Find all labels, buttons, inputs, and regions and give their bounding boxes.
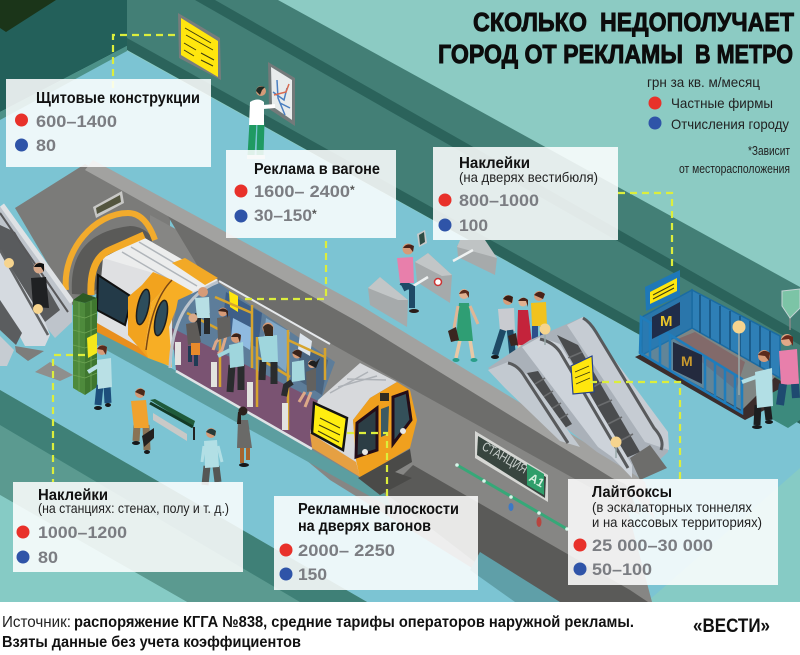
outer side xyxy=(567,317,669,450)
panel: station stickers: 80 xyxy=(38,548,58,567)
turnstiles xyxy=(368,240,497,327)
handrails xyxy=(187,297,325,430)
front fence xyxy=(640,317,742,413)
upper station wall xyxy=(0,0,800,424)
panel: lightboxes: (в эскалаторных тоннелях xyxy=(592,499,752,515)
panel: station stickers: (на станциях: стенах, полу и т. д.) xyxy=(38,500,229,516)
train rear car body xyxy=(97,237,218,368)
small roof sign at right xyxy=(782,289,800,330)
title: ГОРОД ОТ РЕКЛАМЫ xyxy=(438,39,683,69)
base xyxy=(635,330,800,420)
panel: car advertising: * xyxy=(312,207,317,221)
station name sign: СТАНЦИЯ xyxy=(480,439,530,477)
grey shirt man xyxy=(491,295,515,359)
source strip: Взяты данные без учета коэффициентов xyxy=(2,634,301,651)
right escalators xyxy=(488,317,669,480)
interior back wall xyxy=(172,282,335,402)
woman at right xyxy=(779,334,799,405)
orange door one xyxy=(128,272,172,358)
orange roof hatch xyxy=(172,258,218,285)
base body xyxy=(488,317,668,478)
yellow lightbox xyxy=(571,356,594,394)
billboard on wall xyxy=(178,13,221,80)
metro entrance xyxy=(635,270,800,420)
people in train xyxy=(186,287,320,407)
title xyxy=(438,7,794,69)
standing man with rail xyxy=(218,333,244,392)
top sign xyxy=(645,270,680,311)
panel: car advertising: * xyxy=(350,183,355,197)
head car windows xyxy=(356,408,377,457)
small sign on floor post xyxy=(417,230,427,247)
metro map poster xyxy=(268,62,295,126)
legend xyxy=(647,74,789,132)
cut edge xyxy=(170,282,218,368)
sign above arch xyxy=(93,191,124,218)
panel: car advertising xyxy=(226,150,396,238)
bench xyxy=(150,399,195,441)
panel: door ads: Рекламные плоскости xyxy=(298,501,459,518)
middle panel xyxy=(522,337,632,478)
yellow shirt man xyxy=(531,291,547,340)
bearded man xyxy=(258,322,278,384)
station name sign xyxy=(475,431,548,502)
station name sign: А1 xyxy=(526,470,547,490)
head car orange front xyxy=(353,382,417,478)
panel: car advertising: 30–150 xyxy=(254,206,312,225)
right green block xyxy=(770,378,800,428)
panel: lobby stickers: 800–1000 xyxy=(459,191,539,210)
person at map xyxy=(247,86,275,159)
man at turnstile xyxy=(397,244,419,313)
entrance lamp xyxy=(738,327,740,395)
panel: lightboxes: и на кассовых территориях) xyxy=(592,514,762,530)
seated woman xyxy=(213,308,231,354)
standing man xyxy=(195,287,210,336)
roof xyxy=(103,237,218,293)
group of three people xyxy=(491,291,547,360)
metro entrance: M xyxy=(681,353,693,369)
panel: car advertising: 1600– 2400 xyxy=(254,182,350,201)
woman in green dress xyxy=(448,289,478,362)
lower steps xyxy=(527,371,572,430)
train shadow xyxy=(358,449,412,495)
panel: billboards: 600–1400 xyxy=(36,112,117,131)
metro entrance: M xyxy=(660,313,672,330)
panel: lobby stickers: Наклейки xyxy=(459,155,530,172)
legend: Частные фирмы xyxy=(671,95,773,111)
man in pale shirt xyxy=(202,428,222,485)
panel: door ads: 2000– 2250 xyxy=(298,541,395,560)
head car yellow screen xyxy=(312,403,347,450)
lamps left xyxy=(4,258,43,314)
footnote xyxy=(679,144,790,176)
panel: station stickers: 1000–1200 xyxy=(38,523,127,542)
floor plate xyxy=(630,445,667,480)
orange door two xyxy=(145,280,193,367)
window rear xyxy=(97,275,132,325)
panel: car advertising: Реклама в вагоне xyxy=(254,161,380,178)
panel: lobby stickers: (на дверях вестибюля) xyxy=(459,169,598,185)
source strip xyxy=(0,602,800,655)
interior ad xyxy=(229,291,238,312)
panel: door ads: на дверях вагонов xyxy=(298,518,431,535)
panel: lobby stickers: 100 xyxy=(459,216,488,235)
callout leader lines xyxy=(53,35,680,496)
panel: lightboxes: 25 000–30 000 xyxy=(592,536,713,555)
green metro line xyxy=(455,463,569,531)
man at pillar xyxy=(88,345,112,410)
lower panel xyxy=(488,362,580,447)
source strip: Источник: xyxy=(2,614,71,631)
tunnel arch xyxy=(66,213,155,295)
man in coat with child xyxy=(186,314,201,366)
legend: Отчисления городу xyxy=(671,116,789,132)
steps xyxy=(557,335,640,458)
seated couple xyxy=(284,350,320,407)
tunnel structure xyxy=(15,160,655,602)
interior floor xyxy=(172,328,320,448)
panel: lightboxes: 50–100 xyxy=(592,560,652,579)
panel: station stickers: Наклейки xyxy=(38,487,108,504)
back fence xyxy=(692,290,780,378)
left escalators xyxy=(0,205,72,366)
head car body xyxy=(310,363,397,477)
legend: грн за кв. м/месяц xyxy=(647,74,760,90)
panel: billboards: 80 xyxy=(36,136,56,155)
woman in red xyxy=(508,298,532,360)
handrails xyxy=(508,318,662,468)
panel: door ads: 150 xyxy=(298,565,327,584)
panel: door ads xyxy=(274,496,478,590)
man at entrance xyxy=(742,350,773,429)
orange rim xyxy=(91,235,144,295)
train xyxy=(91,235,417,478)
seat dividers xyxy=(178,342,285,430)
title: СКОЛЬКО xyxy=(473,7,587,37)
panel: lobby stickers xyxy=(433,147,618,240)
woman in grey xyxy=(237,406,252,467)
panel: lightboxes: Лайтбоксы xyxy=(592,484,672,501)
panel: billboards: Щитовые конструкции xyxy=(36,90,200,107)
floor plates xyxy=(15,346,73,381)
source strip: «ВЕСТИ» xyxy=(693,616,770,637)
person on escalator xyxy=(31,262,49,308)
panel: station stickers xyxy=(13,482,243,572)
panel: billboards xyxy=(6,79,211,167)
source strip: распоряжение КГГА №838, средние тарифы операторов наружной рекламы. xyxy=(74,614,634,631)
green pillar xyxy=(73,293,97,395)
footnote: *Зависит xyxy=(748,144,790,158)
M panels xyxy=(673,342,702,384)
lower wall bands xyxy=(0,390,800,602)
lamps right xyxy=(540,324,622,458)
man with briefcase xyxy=(131,388,154,454)
panel: lightboxes xyxy=(568,479,778,585)
